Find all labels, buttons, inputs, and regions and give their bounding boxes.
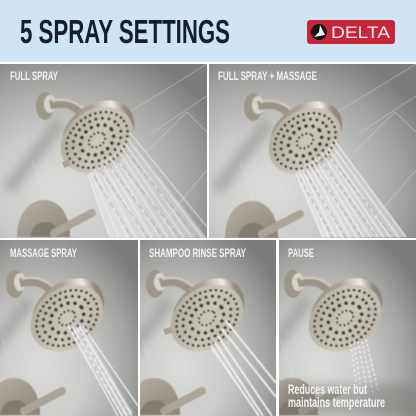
water: full spray bbox=[88, 133, 207, 238]
water: full spray + massage bbox=[296, 140, 406, 238]
panel: full spray + massage bbox=[209, 64, 416, 238]
title: 5 SPRAY SETTINGS bbox=[20, 13, 230, 50]
water: shampoo rinse spray bbox=[211, 321, 276, 416]
label: massage spray: MASSAGE SPRAY bbox=[10, 246, 77, 260]
shade behind caption bbox=[279, 384, 416, 416]
panel: full spray bbox=[0, 64, 207, 238]
caption: pause bbox=[288, 382, 385, 410]
label: full spray + massage: FULL SPRAY + MASSAGE bbox=[218, 69, 317, 83]
header band bbox=[0, 0, 416, 62]
icon: selector knob bbox=[163, 327, 173, 335]
caption: pause: Reduces water but bbox=[288, 382, 367, 397]
panel: shampoo rinse spray bbox=[140, 240, 276, 416]
panel: massage spray bbox=[0, 240, 138, 416]
label: shampoo rinse spray: SHAMPOO RINSE SPRAY bbox=[149, 246, 246, 260]
panel: pause bbox=[279, 240, 416, 416]
logo: Delta: DELTA bbox=[331, 24, 390, 42]
water: pause droplets bbox=[351, 340, 378, 395]
icon: selector knob bbox=[62, 160, 71, 168]
label: full spray: FULL SPRAY bbox=[10, 69, 58, 83]
water: massage spray bbox=[68, 326, 138, 416]
logo: Delta bbox=[307, 20, 395, 44]
label: pause: PAUSE bbox=[288, 246, 314, 260]
